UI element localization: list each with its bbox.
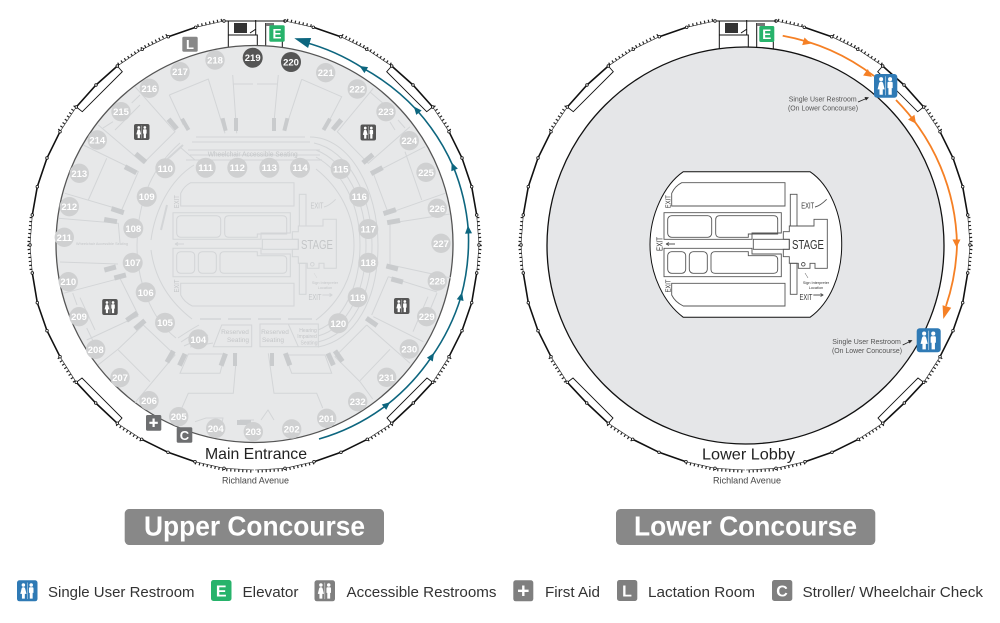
- section numbers: 223: [378, 107, 394, 118]
- legend item: single user restroom: [17, 580, 194, 601]
- legend item: elevator: [211, 580, 299, 601]
- stage labels: upper: Sign Interpreter: [312, 281, 339, 285]
- section numbers: 112: [230, 163, 245, 174]
- section numbers: 104: [190, 335, 207, 346]
- section numbers: [55, 50, 451, 441]
- section numbers: 214: [89, 136, 106, 146]
- section numbers: 107: [125, 258, 141, 269]
- stage labels: lower: [656, 195, 830, 302]
- section numbers: 215: [113, 107, 130, 118]
- legend item: first aid: [513, 580, 600, 601]
- stage floor outline: lower: [650, 172, 842, 317]
- arena floor disc: lower: [547, 47, 944, 444]
- stage labels: upper: Seating: [301, 340, 318, 346]
- legend item: accessible restrooms: [314, 580, 496, 601]
- highlighted sections 219 and 220: [243, 48, 301, 72]
- section numbers: 119: [350, 293, 365, 304]
- icon: single user restroom south: [917, 328, 941, 352]
- stage labels: upper: STAGE: [301, 238, 333, 252]
- callout: single user restroom south: [832, 339, 912, 355]
- section tabs: [104, 117, 404, 425]
- outer building ring: upper: [28, 20, 480, 471]
- section numbers: 203: [245, 427, 261, 438]
- section numbers: 202: [284, 424, 300, 436]
- legend item: stroller wheelchair check: Stroller/ Wheelchair Check: [802, 584, 984, 601]
- seating section outlines: [58, 75, 451, 432]
- stage labels: lower: EXIT: [800, 293, 813, 302]
- callout: single user restroom north: Single User Restroom: [789, 96, 857, 104]
- icon: lactation room: [182, 37, 198, 52]
- section numbers: 108: [125, 224, 141, 235]
- stage labels: upper: Impaired: [297, 334, 317, 340]
- stage labels: upper: [76, 150, 339, 346]
- legend item: single user restroom: Single User Restroom: [48, 584, 194, 601]
- section numbers: 110: [158, 164, 173, 175]
- label: richland avenue: Richland Avenue: [222, 476, 289, 486]
- section numbers: 229: [419, 312, 435, 323]
- stage labels: upper: EXIT: [308, 292, 322, 302]
- label: richland avenue lower: Richland Avenue: [713, 476, 781, 486]
- seating aisle rows around stage: [137, 137, 378, 347]
- arrow: route to upper concourse: [293, 33, 472, 439]
- legend item: elevator: Elevator: [242, 584, 299, 601]
- icon: stroller check: [177, 427, 192, 443]
- icon: elevator: [269, 25, 285, 42]
- icon: single user restroom north: [874, 74, 897, 98]
- callout: single user restroom north: [788, 96, 869, 112]
- stage labels: upper: Wheelchair Accessible Seating: [76, 242, 128, 246]
- icon: stroller check: C: [180, 428, 190, 443]
- section numbers: 204: [208, 424, 224, 435]
- stage labels: upper: Reserved: [221, 329, 249, 336]
- section numbers: 224: [401, 136, 418, 147]
- stage labels: upper: Reserved: [261, 329, 289, 336]
- section numbers: 228: [429, 276, 445, 288]
- legend item: stroller wheelchair check: [772, 580, 984, 601]
- legend item: first aid: First Aid: [545, 584, 600, 601]
- callout: single user restroom north: (On Lower Concourse): [788, 106, 858, 112]
- stage layout: upper: [173, 183, 336, 306]
- section numbers: 201: [319, 414, 335, 425]
- legend item: lactation room: L: [622, 584, 632, 600]
- callout: single user restroom south: (On Lower Concourse): [832, 348, 902, 355]
- section numbers: 115: [333, 164, 349, 176]
- section numbers: 231: [379, 373, 395, 384]
- panel: upper concourse map: [28, 20, 480, 486]
- icon: elevator: E: [272, 26, 282, 42]
- section numbers: 113: [262, 163, 277, 174]
- icons: accessible restrooms on map: [102, 124, 409, 315]
- section numbers: 221: [318, 68, 334, 79]
- stage labels: lower: Location: [809, 286, 823, 290]
- legend item: elevator: E: [216, 584, 227, 600]
- stage labels: lower: EXIT: [656, 237, 664, 251]
- stage labels: upper: Seating: [262, 337, 284, 344]
- stage labels: upper: Seating: [227, 337, 249, 344]
- stage labels: lower: EXIT: [666, 195, 672, 208]
- stage labels: upper: EXIT: [174, 195, 181, 208]
- section numbers: 226: [429, 204, 445, 215]
- section numbers: 111: [198, 163, 214, 174]
- stage labels: lower: EXIT: [801, 202, 814, 210]
- outer building ring: lower: [520, 20, 972, 471]
- label: lower lobby: Lower Lobby: [702, 446, 795, 464]
- section numbers: 114: [292, 163, 308, 174]
- section numbers: 232: [350, 397, 366, 408]
- section numbers: 118: [361, 258, 376, 269]
- highlighted sections 219 and 220: 219: [245, 53, 261, 64]
- highlighted sections 219 and 220: 220: [283, 58, 299, 68]
- stage labels: upper: EXIT: [174, 279, 181, 292]
- heading: upper concourse: Upper Concourse: [144, 510, 365, 542]
- stage labels: upper: Wheelchair Accessible Seating: [208, 150, 298, 158]
- section numbers: 211: [57, 233, 73, 244]
- arena floor disc: upper: [56, 46, 453, 442]
- section numbers: 218: [207, 56, 223, 66]
- panel: lower concourse map: [520, 20, 972, 486]
- section numbers: 205: [171, 412, 187, 423]
- legend item: accessible restrooms: Accessible Restrooms: [346, 584, 496, 601]
- stage labels: lower: STAGE: [792, 238, 824, 252]
- section numbers: 222: [349, 84, 365, 96]
- section numbers: 216: [141, 84, 157, 95]
- section numbers: 207: [112, 373, 128, 384]
- section numbers: 109: [139, 192, 155, 203]
- arrow: route to lower concourse: [783, 36, 961, 320]
- legend item: lactation room: Lactation Room: [648, 584, 755, 601]
- section numbers: 217: [172, 67, 188, 78]
- section numbers: 106: [138, 288, 154, 299]
- section numbers: 209: [71, 312, 87, 323]
- icon: elevator lower: [759, 26, 774, 42]
- label: main entrance: Main Entrance: [205, 446, 307, 463]
- section numbers: 117: [361, 224, 376, 236]
- section numbers: 208: [88, 345, 104, 356]
- section numbers: 213: [71, 169, 87, 180]
- stage labels: upper: EXIT: [310, 200, 324, 210]
- section numbers: 105: [157, 318, 174, 329]
- section numbers: 230: [401, 344, 417, 356]
- icon: lactation room: L: [186, 37, 194, 52]
- callout: single user restroom south: Single User Restroom: [832, 339, 901, 346]
- stage labels: lower: Sign Interpreter: [803, 281, 830, 285]
- legend: [17, 580, 984, 601]
- section numbers: 120: [330, 319, 346, 330]
- section numbers: 212: [61, 202, 77, 213]
- icon: elevator lower: E: [762, 27, 771, 42]
- heading: lower concourse: Lower Concourse: [634, 510, 857, 542]
- stage layout: lower: [664, 183, 827, 306]
- section numbers: 206: [141, 396, 157, 407]
- section numbers: 225: [418, 168, 435, 179]
- stage labels: upper: Location: [318, 286, 332, 290]
- stage labels: upper: Hearing: [299, 328, 317, 334]
- section numbers: 116: [352, 192, 367, 203]
- stage labels: lower: EXIT: [666, 279, 672, 292]
- legend item: stroller wheelchair check: C: [776, 584, 788, 600]
- section numbers: 210: [60, 277, 76, 288]
- section numbers: 227: [433, 239, 449, 250]
- legend item: lactation room: [617, 580, 755, 601]
- icon: first aid: [146, 415, 161, 431]
